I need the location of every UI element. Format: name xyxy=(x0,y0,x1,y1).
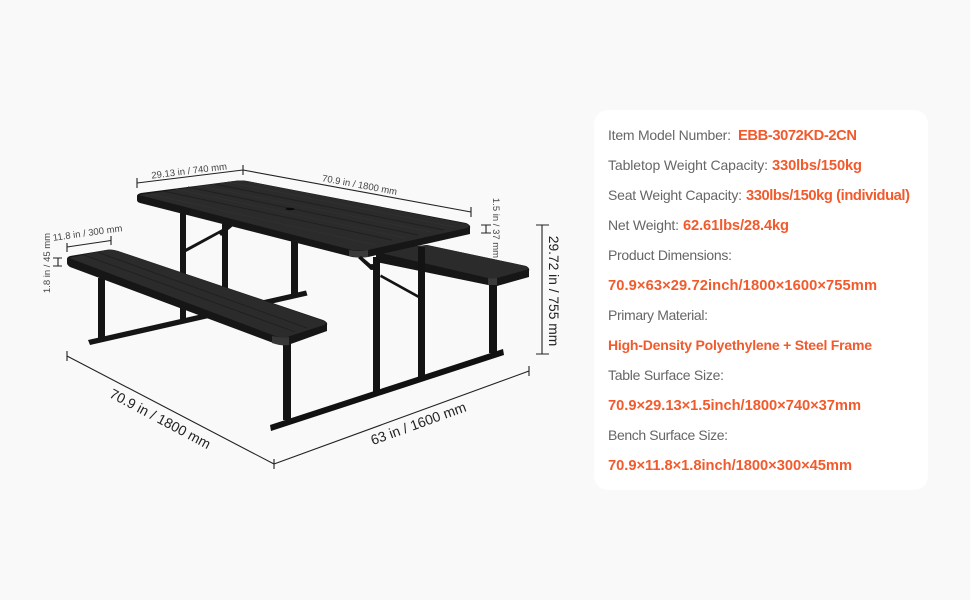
near leg frame posts and braces xyxy=(358,247,497,392)
spec: table surface label: Table Surface Size: xyxy=(608,367,724,383)
dimension: overall width: 63 in / 1600 mm xyxy=(368,399,468,448)
spec: seat capacity: 330lbs/150kg (individual) xyxy=(746,188,910,204)
far leg frame xyxy=(88,208,308,345)
dimension: height: 29.72 in / 755 mm xyxy=(546,236,561,346)
spec: net weight: Net Weight: xyxy=(608,217,679,233)
dimension: table width xyxy=(137,161,243,188)
spec: model number: Item Model Number: xyxy=(608,127,731,143)
spec: product dimensions label: Product Dimensions: xyxy=(608,247,732,263)
picnic table illustration xyxy=(67,180,529,431)
near foot bar xyxy=(270,349,504,431)
front bench leg frame xyxy=(98,278,105,338)
dimension: table length xyxy=(243,170,471,217)
spec: product dimensions value: 70.9×63×29.72inch/1800×1600×755mm xyxy=(608,278,877,294)
spec: bench surface value: 70.9×11.8×1.8inch/1800×300×45mm xyxy=(608,458,852,474)
dimension: bench thickness: 1.8 in / 45 mm xyxy=(42,233,53,293)
dimension: table width: 29.13 in / 740 mm xyxy=(151,161,228,182)
spec: material value: High-Density Polyethylene + Steel Frame xyxy=(608,337,872,353)
front bench xyxy=(67,250,327,345)
dimension: height xyxy=(536,225,561,354)
dimension: table length: 70.9 in / 1800 mm xyxy=(321,173,398,198)
spec: material label: Primary Material: xyxy=(608,307,708,323)
dimension: bench thickness xyxy=(42,233,62,293)
panel: specifications xyxy=(594,110,928,490)
dimension: table thickness: 1.5 in / 37 mm xyxy=(490,198,501,258)
dimension: overall width xyxy=(274,366,529,464)
near bench support xyxy=(283,344,291,420)
spec: seat capacity: Seat Weight Capacity: xyxy=(608,187,742,203)
spec: table surface value: 70.9×29.13×1.5inch/1800×740×37mm xyxy=(608,398,861,414)
spec: model number xyxy=(608,127,857,144)
dimension: table thickness xyxy=(481,198,501,258)
umbrella hole xyxy=(286,208,294,210)
spec: net weight xyxy=(608,217,789,234)
spec: model number: EBB-3072KD-2CN xyxy=(738,128,857,144)
spec: seat capacity xyxy=(608,187,910,204)
far bench xyxy=(376,245,529,286)
tabletop xyxy=(137,180,470,258)
spec: tabletop capacity xyxy=(608,157,862,174)
spec: net weight: 62.61lbs/28.4kg xyxy=(683,218,789,234)
spec: bench surface label: Bench Surface Size: xyxy=(608,427,728,443)
spec: tabletop capacity: Tabletop Weight Capacity: xyxy=(608,157,768,173)
dimension: bench width: 11.8 in / 300 mm xyxy=(52,223,123,244)
dimension: overall length: 70.9 in / 1800 mm xyxy=(107,385,214,452)
dimension: overall length xyxy=(67,351,274,469)
spec: tabletop capacity: 330lbs/150kg xyxy=(772,158,862,174)
